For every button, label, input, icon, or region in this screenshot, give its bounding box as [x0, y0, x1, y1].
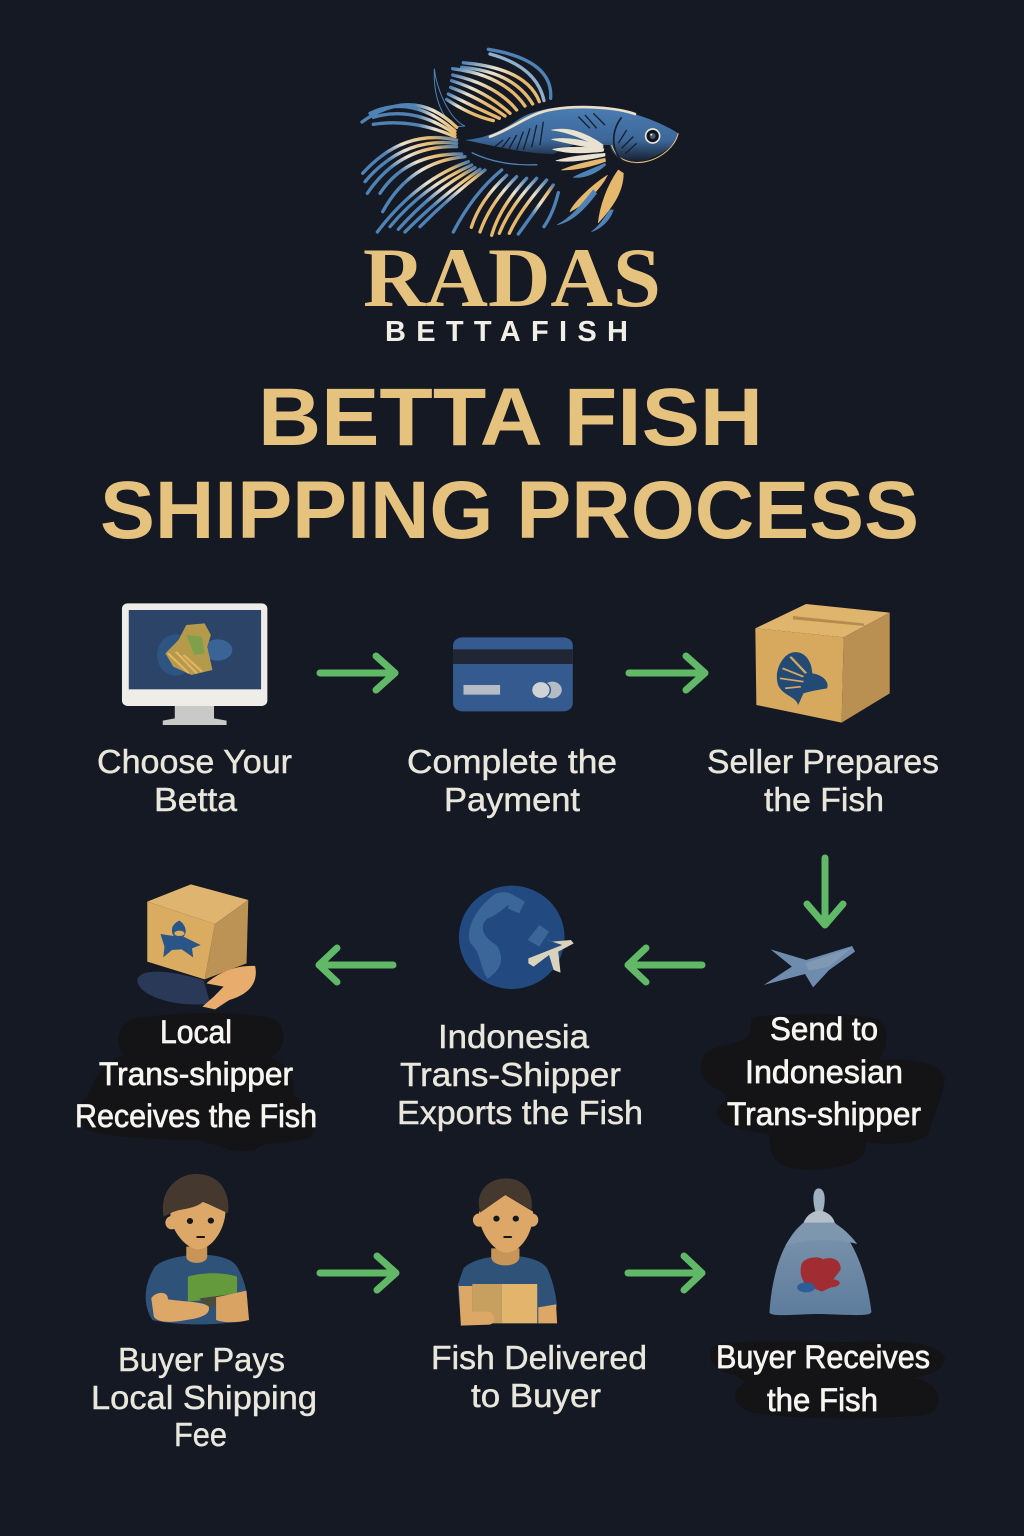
logo subtitle BETTAFISH: BETTAFISH [385, 316, 628, 348]
logo: betta fish illustration [362, 49, 678, 235]
icon: hand holding box [137, 884, 256, 1009]
arrow: step 1 to step 2 [320, 656, 395, 690]
label: Indonesian [745, 1054, 903, 1090]
body stripes [495, 113, 637, 154]
label: Receives the Fish [75, 1098, 317, 1134]
label: Buyer Pays [118, 1341, 285, 1378]
arrow: step 8 to step 9 [628, 1256, 702, 1290]
label [91, 1341, 317, 1453]
fish body [465, 106, 678, 163]
step 8: fish delivered to buyer [431, 1178, 647, 1414]
icon: person holding money [146, 1174, 249, 1324]
label: Indonesia [438, 1018, 590, 1055]
icon: fish bag [769, 1188, 871, 1315]
ventral fins [557, 170, 623, 232]
icon: globe with plane [459, 886, 574, 989]
title: SHIPPING PROCESS [100, 465, 919, 556]
icon: monitor [122, 603, 267, 725]
label [716, 1339, 930, 1418]
label [97, 743, 292, 818]
label [707, 743, 939, 818]
label: Local Shipping [91, 1379, 317, 1416]
icon: blue airplane [764, 946, 855, 987]
text backdrop blob [700, 1014, 945, 1170]
label: Choose Your [97, 743, 292, 780]
step 3: seller prepares the fish [707, 604, 939, 818]
label: Fish Delivered [431, 1339, 647, 1376]
arrow: step 4 to step 5 [628, 948, 702, 982]
label: Local [160, 1014, 232, 1050]
label: Buyer Receives [716, 1339, 930, 1375]
dorsal fin [434, 49, 551, 127]
arrow: step 5 to step 6 [319, 948, 393, 982]
label: Payment [444, 781, 580, 818]
label [727, 1011, 921, 1132]
text backdrop blob [710, 1341, 945, 1418]
body highlight and anal fin line [490, 107, 635, 137]
label: to Buyer [471, 1377, 601, 1414]
step 5: Indonesia trans-shipper exports the fish [397, 886, 643, 1131]
logo wordmark RADAS: RADAS [363, 231, 661, 325]
label [397, 1018, 643, 1131]
eye [646, 129, 660, 143]
label: Exports the Fish [397, 1094, 643, 1131]
icon: credit card [453, 637, 573, 711]
text backdrop blob [79, 1013, 316, 1151]
label [431, 1339, 647, 1414]
arrow: step 3 down to step 4 [807, 858, 843, 925]
step 1: choose your betta [97, 603, 292, 818]
icon: cardboard box with fish [755, 604, 890, 723]
arrow: step 2 to step 3 [629, 656, 705, 690]
label: the Fish [767, 1382, 878, 1418]
label: Trans-shipper [727, 1096, 921, 1132]
step 9: buyer receives the fish [710, 1188, 945, 1418]
label: Fee [174, 1416, 227, 1453]
label: Complete the [407, 743, 617, 780]
title: BETTA FISH [258, 372, 763, 463]
arrow: step 7 to step 8 [320, 1256, 396, 1290]
label: the Fish [764, 781, 884, 818]
label: Send to [770, 1011, 878, 1047]
icon: person holding parcel [458, 1178, 557, 1326]
label: Trans-shipper [99, 1056, 293, 1092]
label [75, 1014, 317, 1134]
label: Trans-Shipper [400, 1056, 621, 1093]
tail fin [362, 105, 558, 235]
step 6: local trans-shipper receives the fish [75, 884, 317, 1151]
step 7: buyer pays local shipping fee [91, 1174, 317, 1453]
label: Seller Prepares [707, 743, 939, 780]
step 4: send to Indonesian trans-shipper [700, 946, 945, 1170]
label: Betta [154, 781, 238, 818]
title [100, 372, 919, 556]
step 2: complete the payment [407, 637, 617, 818]
label [407, 743, 617, 818]
pectoral fin [552, 129, 606, 177]
